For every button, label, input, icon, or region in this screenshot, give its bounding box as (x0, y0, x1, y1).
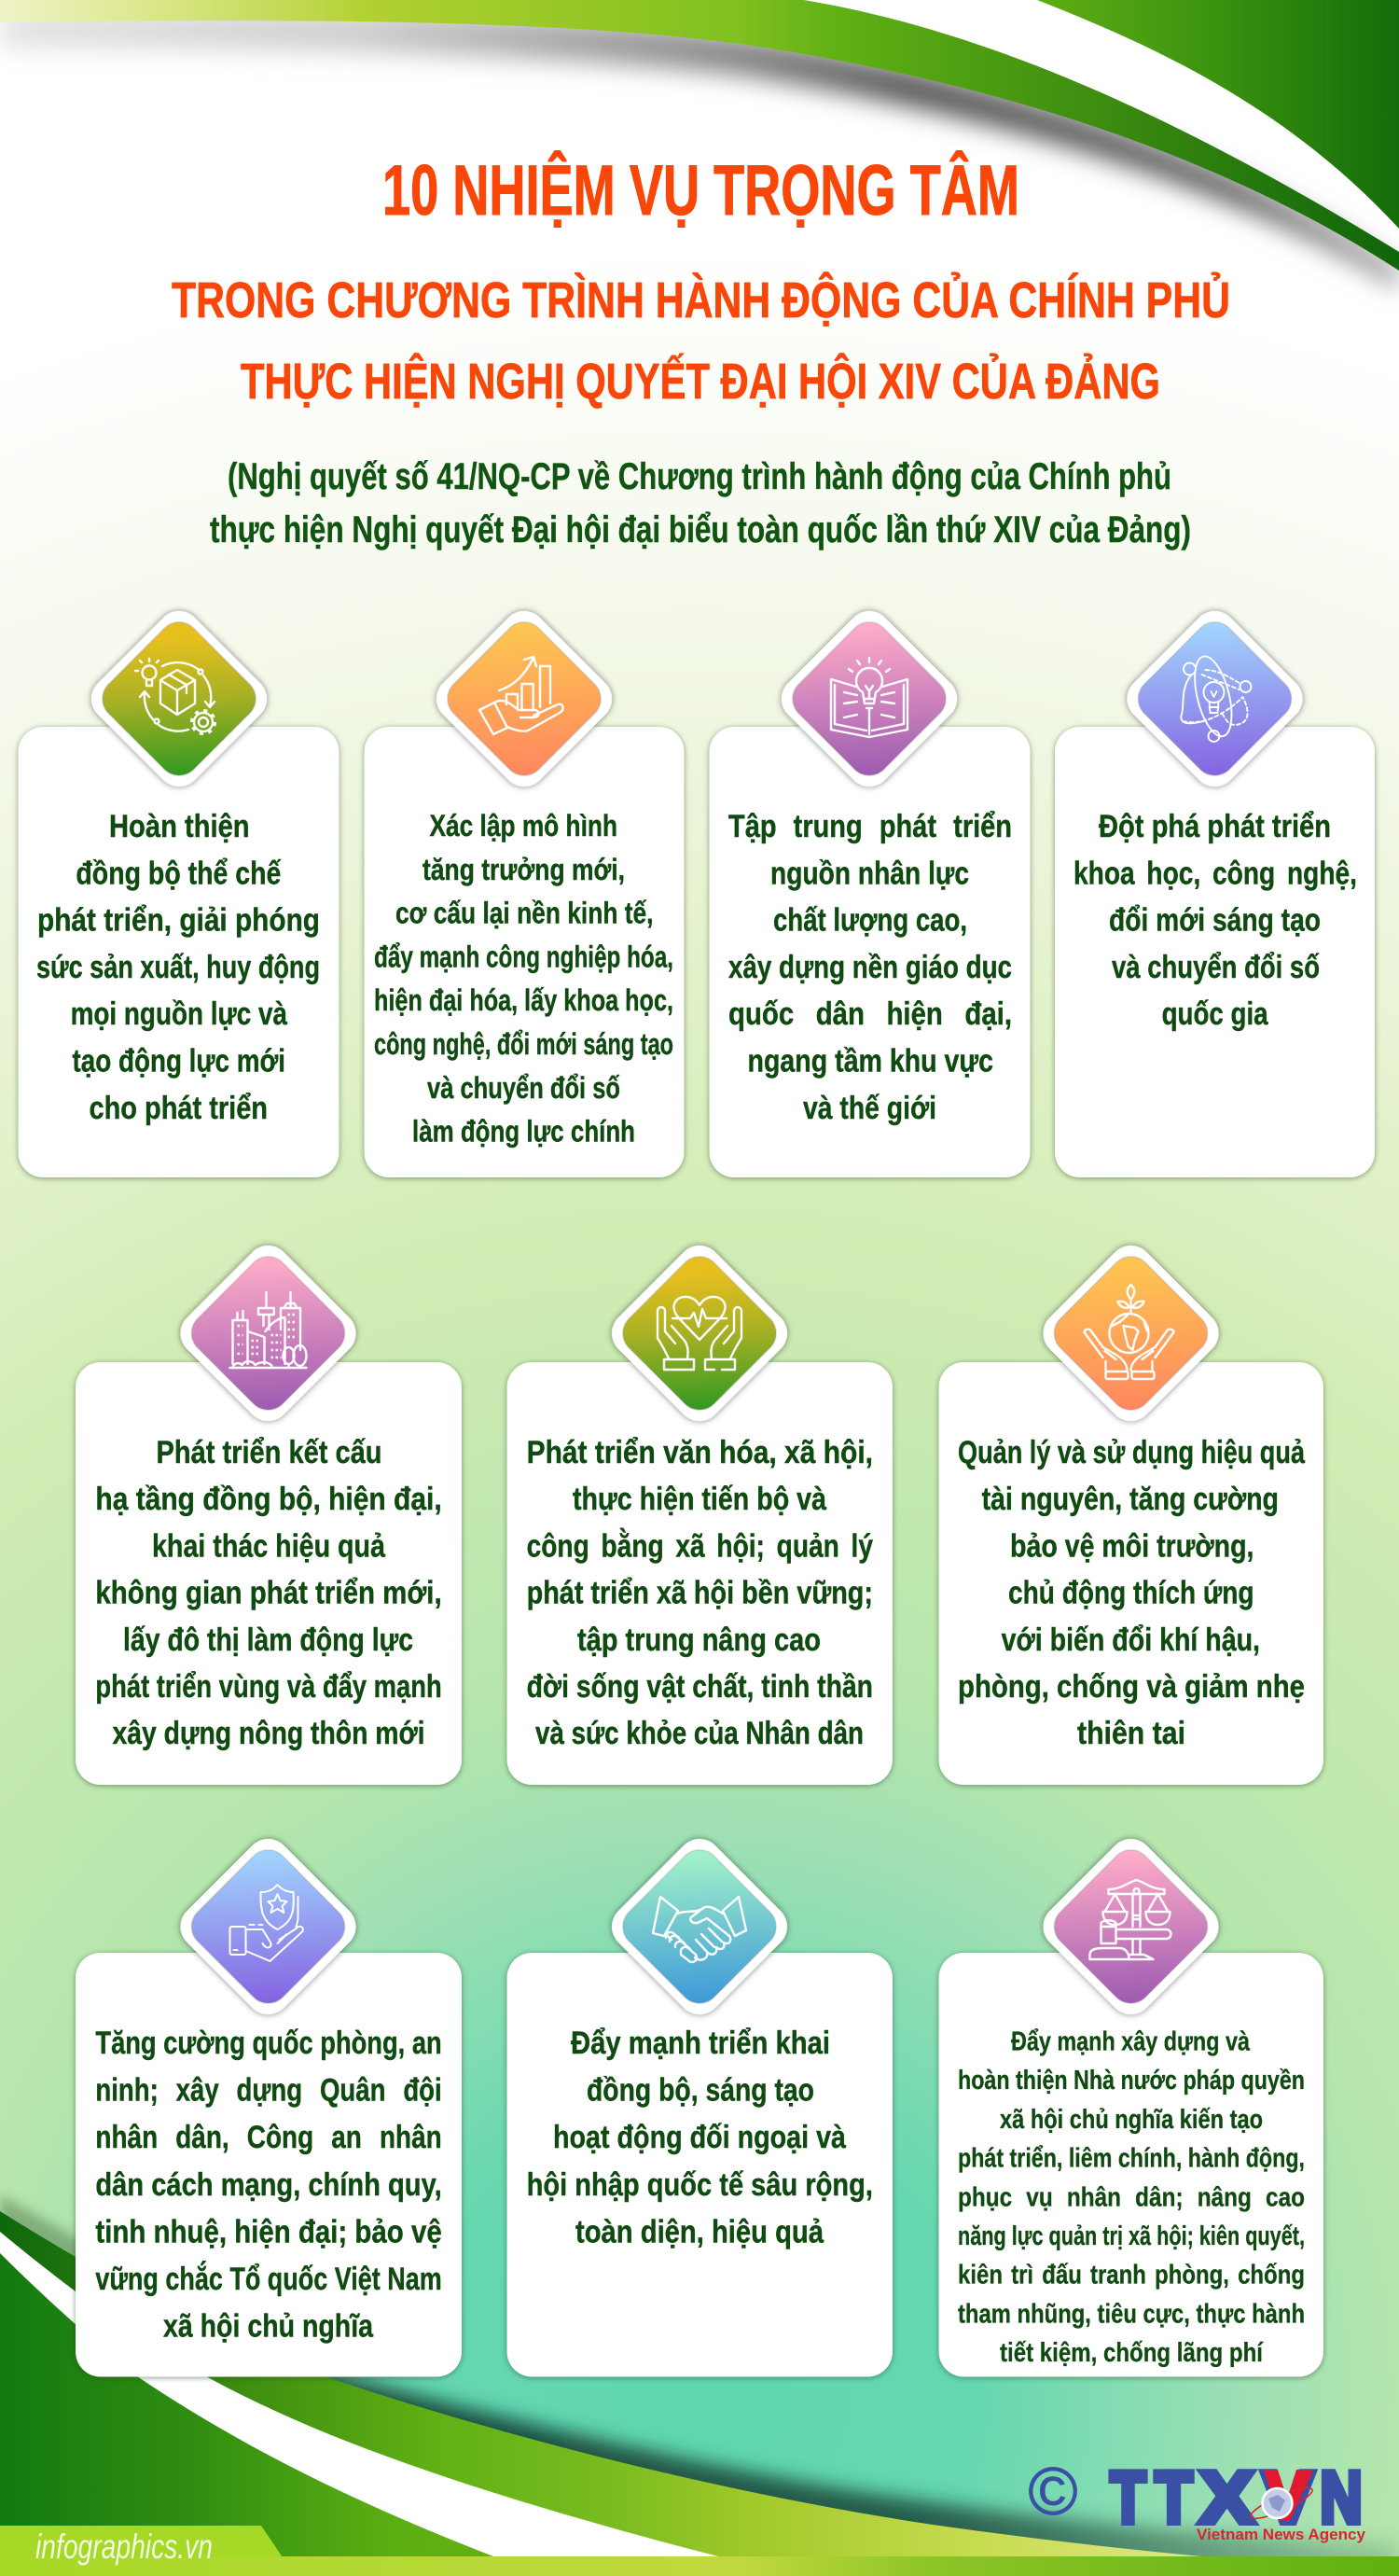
text block: Quản lý và sử dụng hiệu quả (958, 1435, 1306, 1470)
text block: hoạt động đối ngoại và (553, 2120, 847, 2155)
text block: cho phát triển (90, 1091, 268, 1126)
text block: Xác lập mô hình (429, 809, 617, 842)
text block: mọi nguồn lực và (71, 996, 288, 1032)
text block: Phát triển kết cấu (157, 1435, 382, 1470)
panel: task 10 (938, 1830, 1323, 2377)
text block: tiết kiệm, chống lãng phí (1000, 2338, 1264, 2368)
text block: phục vụ nhân dân; nâng cao (958, 2182, 1305, 2212)
text block: Tăng cường quốc phòng, an (95, 2026, 442, 2061)
logo: TTXVN Vietnam News Agency: V (1263, 2456, 1313, 2538)
text block: nguồn nhân lực (770, 856, 969, 891)
text block: làm động lực chính (412, 1115, 635, 1149)
panel: task 5 (76, 1236, 462, 1785)
text block: ngang tầm khu vực (748, 1043, 993, 1079)
logo: TTXVN Vietnam News Agency: N (1321, 2456, 1362, 2538)
text block: hạ tầng đồng bộ, hiện đại, (95, 1482, 442, 1517)
top swoosh (0, 0, 1399, 291)
text block: chủ động thích ứng (1008, 1576, 1254, 1611)
text block: và chuyển đổi số (427, 1071, 620, 1105)
text block: nhân dân, Công an nhân (95, 2120, 442, 2155)
panel: task 2 (364, 602, 685, 1177)
text block: thực hiện tiến bộ và (573, 1482, 827, 1517)
text block: Đột phá phát triển (1099, 809, 1331, 844)
text block: hiện đại hóa, lấy khoa học, (374, 983, 673, 1017)
text block: khai thác hiệu quả (152, 1528, 386, 1564)
logo: TTXVN Vietnam News Agency: Vietnam News Agency (1197, 2526, 1366, 2543)
panel: task 9 (507, 1830, 893, 2377)
text block: tài nguyên, tăng cường (982, 1482, 1279, 1517)
text block: tham nhũng, tiêu cực, thực hành (958, 2299, 1305, 2329)
icon: growth chart on hand (479, 657, 563, 734)
text block: đẩy mạnh công nghiệp hóa, (374, 940, 673, 973)
resolution note (210, 456, 1191, 550)
bottom swoosh (0, 2194, 1399, 2576)
logo: TTXVN Vietnam News Agency: T (1110, 2456, 1145, 2538)
icon: heart in hands (658, 1297, 741, 1370)
text block: ninh; xây dựng Quân đội (95, 2073, 442, 2109)
text block: đồng bộ, sáng tạo (587, 2073, 814, 2109)
text block: kiên trì đấu tranh phòng, chống (958, 2261, 1305, 2291)
text block: dân cách mạng, chính quy, (95, 2167, 442, 2203)
icon: globe in hands (1084, 1285, 1173, 1379)
text block: đồng bộ thể chế (76, 856, 282, 891)
text block: tinh nhuệ, hiện đại; bảo vệ (95, 2214, 442, 2249)
panel: task 8 (76, 1830, 462, 2377)
text block (527, 2026, 873, 2249)
text block: Hoàn thiện (109, 809, 250, 844)
text block: xây dựng nông thôn mới (112, 1716, 425, 1751)
text block: cơ cấu lại nền kinh tế, (395, 897, 653, 930)
text block: hoàn thiện Nhà nước pháp quyền (958, 2066, 1305, 2096)
text block: xây dựng nền giáo dục (728, 950, 1012, 985)
text block: không gian phát triển mới, (95, 1576, 442, 1611)
icon: product cycle (135, 659, 215, 733)
text block (527, 1435, 873, 1751)
subtitle heading (172, 272, 1230, 410)
text block (36, 809, 320, 1126)
panel: task 1 (19, 602, 339, 1177)
text block: chất lượng cao, (773, 903, 967, 939)
text block: đổi mới sáng tạo (1109, 903, 1321, 939)
text block: toàn diện, hiệu quả (575, 2214, 824, 2249)
text block: và sức khỏe của Nhân dân (535, 1716, 864, 1751)
subtitle heading: THỰC HIỆN NGHỊ QUYẾT ĐẠI HỘI XIV CỦA ĐẢNG (241, 353, 1160, 410)
text block: sức sản xuất, huy động (36, 950, 320, 985)
text block (374, 809, 673, 1149)
text block: lấy đô thị làm động lực (123, 1622, 413, 1658)
icon: shield and hand (229, 1885, 303, 1961)
text block: quốc dân hiện đại, (728, 996, 1012, 1032)
panel: task 6 (507, 1236, 893, 1785)
text block: đời sống vật chất, tinh thần (527, 1669, 873, 1705)
text block: Tập trung phát triển (728, 809, 1012, 844)
text block: bảo vệ môi trường, (1010, 1528, 1254, 1564)
text block: xã hội chủ nghĩa kiến tạo (1000, 2105, 1263, 2135)
text block (958, 1435, 1306, 1751)
logo: TTXVN Vietnam News Agency: T (1155, 2456, 1192, 2538)
icon: city buildings (229, 1292, 306, 1368)
text block (95, 2026, 442, 2345)
text block: thiên tai (1077, 1716, 1185, 1751)
text block: vững chắc Tổ quốc Việt Nam (95, 2260, 442, 2297)
title: 10 NHIỆM VỤ TRỌNG TÂM (382, 150, 1019, 230)
icon: book and light bulb (831, 658, 907, 737)
text block: và chuyển đổi số (1112, 950, 1320, 985)
icon: scales and gavel (1089, 1880, 1171, 1959)
text block: phát triển, giải phóng (37, 903, 320, 939)
text block: công bằng xã hội; quản lý (527, 1526, 873, 1564)
icon: atom and bulb (1181, 653, 1252, 742)
text block: phòng, chống và giảm nhẹ (958, 1669, 1305, 1705)
text block: phát triển, liêm chính, hành động, (958, 2144, 1305, 2174)
text block: xã hội chủ nghĩa (163, 2309, 374, 2345)
text block: Đẩy mạnh xây dựng và (1011, 2026, 1251, 2056)
text block: phát triển vùng và đẩy mạnh (95, 1669, 442, 1705)
panel: task 3 (709, 602, 1030, 1177)
panel: task 7 (938, 1236, 1323, 1785)
text block: tạo động lực mới (73, 1043, 285, 1079)
text block (95, 1435, 442, 1751)
text block: công nghệ, đổi mới sáng tạo (374, 1027, 673, 1061)
source label: infographics.vn: infographics.vn (35, 2527, 213, 2566)
text block: tăng trưởng mới, (422, 853, 625, 886)
text block: với biến đổi khí hậu, (1002, 1622, 1260, 1658)
icon: handshake (653, 1897, 746, 1962)
text block: và thế giới (803, 1091, 936, 1126)
text block: Phát triển văn hóa, xã hội, (527, 1435, 873, 1470)
text block: hội nhập quốc tế sâu rộng, (527, 2167, 873, 2203)
text block (1073, 809, 1357, 1032)
text block: Đẩy mạnh triển khai (571, 2026, 830, 2061)
text block (728, 809, 1012, 1126)
logo: TTXVN Vietnam News Agency: X (1199, 2456, 1254, 2538)
copyright symbol: © (1028, 2455, 1078, 2529)
text block: phát triển xã hội bền vững; (527, 1576, 873, 1611)
panel: task 4 (1055, 602, 1375, 1177)
logo: TTXVN Vietnam News Agency (1110, 2456, 1366, 2543)
text block: tập trung nâng cao (577, 1622, 821, 1658)
text block: quốc gia (1162, 996, 1268, 1032)
text block (958, 2026, 1305, 2368)
